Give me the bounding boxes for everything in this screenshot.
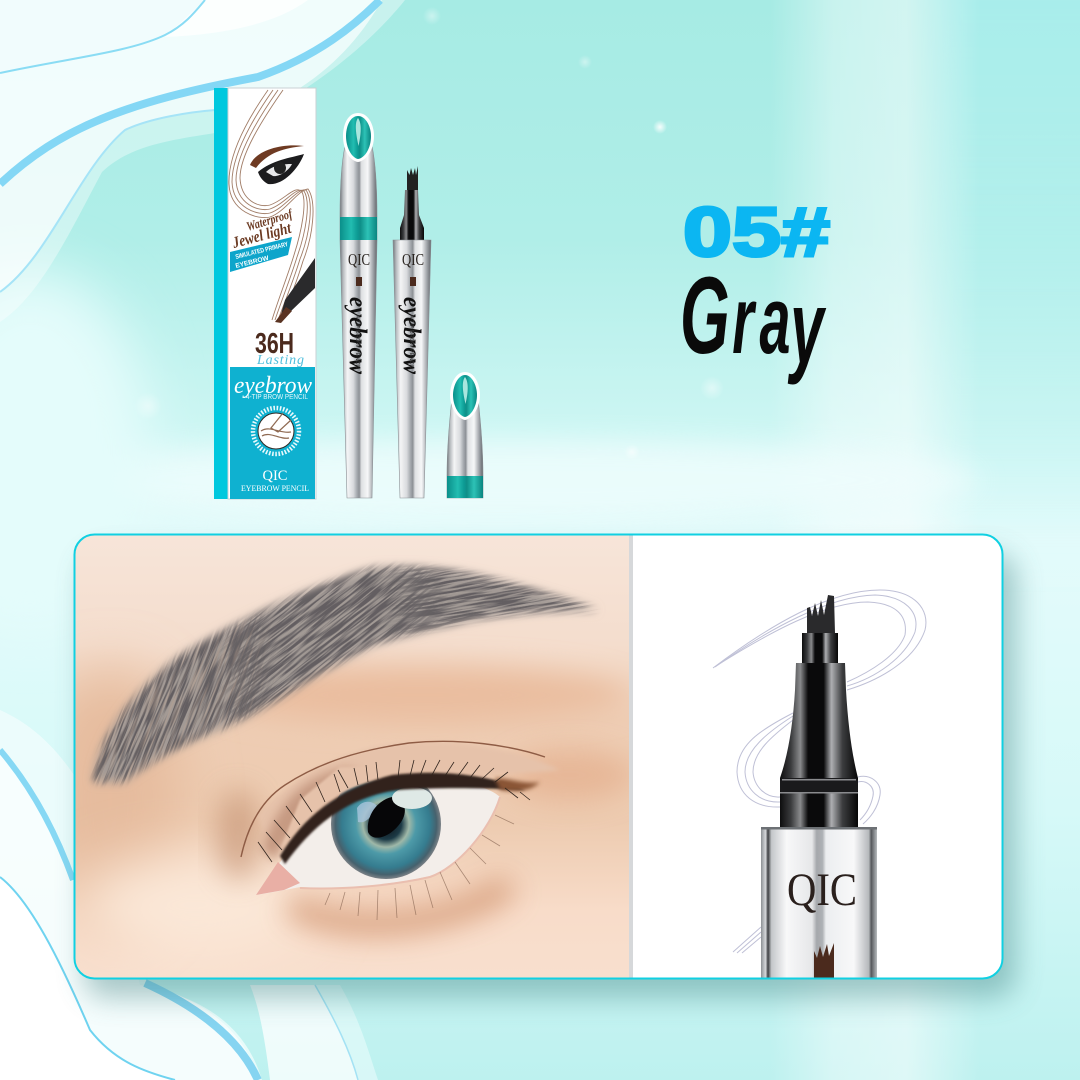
photo: eye with gray eyebrow xyxy=(76,536,629,978)
drawn eye and brow xyxy=(250,145,304,184)
box script title: Waterproof xyxy=(244,205,295,234)
pen label: eyebrow xyxy=(398,297,425,374)
shade name: Gray: r xyxy=(732,266,757,374)
brow guide curves xyxy=(229,90,313,320)
Lasting: Lasting xyxy=(256,353,304,368)
silver pen barrel: QIC xyxy=(787,864,857,916)
shade name: Gray: a xyxy=(759,266,790,374)
box ribbon: EYEBROW xyxy=(235,255,270,270)
box nib illustration xyxy=(275,258,315,323)
box script title: Jewel light xyxy=(230,220,293,252)
eye xyxy=(256,760,540,920)
decorative wave: bottom left xyxy=(0,710,378,1080)
pen tip xyxy=(780,595,858,827)
silver pen barrel xyxy=(761,827,877,982)
pen label: QIC xyxy=(402,250,424,269)
box teal lower panel: EYEBROW PENCIL xyxy=(241,483,309,493)
upper eyelid xyxy=(278,744,554,806)
pen label: 4-TIP BROW PENCIL xyxy=(354,315,360,369)
capped pen xyxy=(340,113,377,498)
box teal lower panel: QIC xyxy=(262,468,288,484)
pen label: QIC xyxy=(348,250,370,269)
pen label xyxy=(344,250,371,374)
shade name: Gray: G xyxy=(680,255,730,377)
swirl lines xyxy=(713,590,926,953)
box script title xyxy=(230,205,295,252)
pen cap xyxy=(447,372,483,498)
decorative wave: top left xyxy=(0,0,405,322)
pen label: 4-TIP BROW PENCIL xyxy=(408,315,414,369)
product box xyxy=(214,88,316,499)
box teal lower panel: 4-TIP BROW PENCIL xyxy=(246,394,308,401)
shade name: Gray: y xyxy=(787,270,826,386)
shade number: 05#: 05# xyxy=(683,193,830,271)
box teal lower panel: eyebrow xyxy=(234,373,312,399)
eyebrow xyxy=(88,560,598,788)
box ribbon xyxy=(230,237,292,272)
white pen panel xyxy=(629,534,1002,982)
pen label: eyebrow xyxy=(344,297,371,374)
uncapped pen xyxy=(393,166,431,498)
panel shadow xyxy=(84,554,1016,998)
36H: 36H xyxy=(255,328,294,360)
box ribbon: SIMULATED PRIMARY xyxy=(235,241,289,261)
panel: eye photo and pen closeup xyxy=(74,534,1004,980)
pen label xyxy=(398,250,425,374)
box teal lower panel xyxy=(230,367,315,499)
